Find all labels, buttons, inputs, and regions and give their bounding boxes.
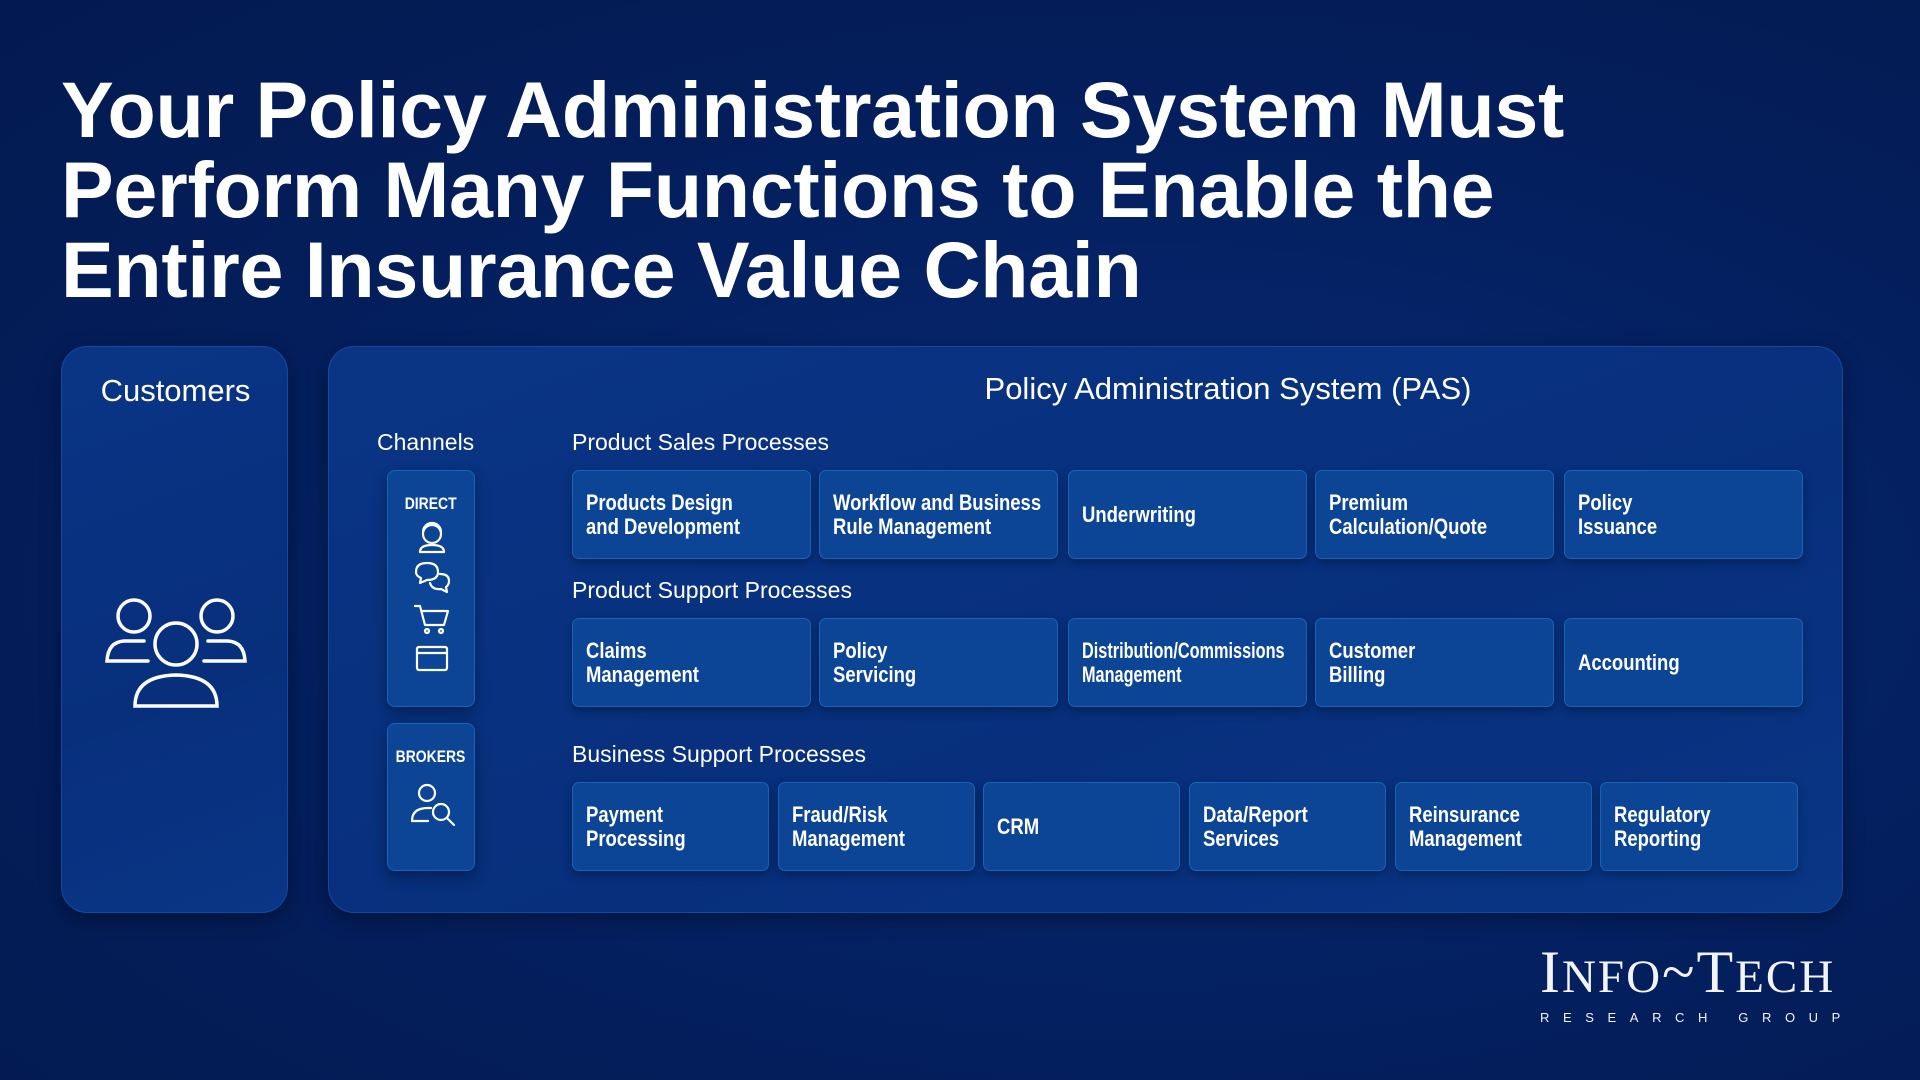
box: Policy — [833, 638, 887, 662]
box — [1068, 470, 1307, 559]
channel: direct: DIRECT — [405, 494, 457, 513]
box — [1189, 782, 1386, 871]
box — [778, 782, 975, 871]
box: Data/Report — [1203, 802, 1308, 826]
box: Products Design — [586, 490, 733, 514]
box: Workflow and Business — [833, 490, 1041, 514]
box: Fraud/Risk — [792, 802, 888, 826]
icon: broker search — [410, 784, 456, 826]
box: Distribution/Commissions — [1082, 638, 1285, 662]
logo: RESEARCH GROUP — [1540, 1010, 1854, 1025]
box: Reporting — [1614, 826, 1701, 850]
icons: direct channel — [414, 522, 450, 672]
box: Underwriting — [1082, 502, 1196, 526]
channel: brokers — [387, 723, 475, 871]
heading: customers: Customers — [101, 373, 250, 408]
box: Reinsurance — [1409, 802, 1520, 826]
box: Payment — [586, 802, 663, 826]
logo: INFO~TECH — [1540, 939, 1835, 1005]
box: Issuance — [1578, 514, 1657, 538]
box: Management — [1082, 662, 1182, 686]
box: Accounting — [1578, 650, 1680, 674]
box — [1564, 470, 1803, 559]
box: Services — [1203, 826, 1279, 850]
box: Customer — [1329, 638, 1415, 662]
panel: customers — [61, 346, 288, 913]
box: CRM — [997, 814, 1039, 838]
channel: direct — [387, 470, 475, 707]
label: product sales: Product Sales Processes — [572, 429, 829, 455]
heading: PAS: Policy Administration System (PAS) — [985, 371, 1471, 406]
box: Calculation/Quote — [1329, 514, 1487, 538]
box — [1600, 782, 1798, 871]
title — [61, 65, 1564, 314]
box: Regulatory — [1614, 802, 1711, 826]
label: business support: Business Support Processes — [572, 741, 866, 767]
box — [819, 470, 1058, 559]
box — [1564, 618, 1803, 707]
box — [1315, 618, 1554, 707]
box: Management — [1409, 826, 1522, 850]
row: product sales — [568, 470, 1807, 567]
box — [572, 782, 769, 871]
box: Management — [586, 662, 699, 686]
box: and Development — [586, 514, 740, 538]
box: Servicing — [833, 662, 916, 686]
box: Billing — [1329, 662, 1385, 686]
box — [983, 782, 1180, 871]
title: Your Policy Administration System Must — [61, 65, 1564, 154]
box: Rule Management — [833, 514, 991, 538]
box — [819, 618, 1058, 707]
title: Entire Insurance Value Chain — [61, 225, 1141, 314]
box: Claims — [586, 638, 647, 662]
title: Perform Many Functions to Enable the — [61, 145, 1494, 234]
box — [1395, 782, 1592, 871]
box — [572, 618, 811, 707]
channel: brokers: BROKERS — [396, 747, 466, 766]
box: Processing — [586, 826, 686, 850]
box — [1315, 470, 1554, 559]
box: Management — [792, 826, 905, 850]
label: channels: Channels — [377, 429, 474, 455]
box: Premium — [1329, 490, 1408, 514]
row: product support — [568, 618, 1807, 715]
label: product support: Product Support Processes — [572, 577, 852, 603]
box — [572, 470, 811, 559]
icon: people group — [105, 598, 247, 708]
panel: PAS — [328, 346, 1843, 913]
box — [1068, 618, 1307, 707]
box: Policy — [1578, 490, 1632, 514]
row: business support — [568, 782, 1802, 879]
